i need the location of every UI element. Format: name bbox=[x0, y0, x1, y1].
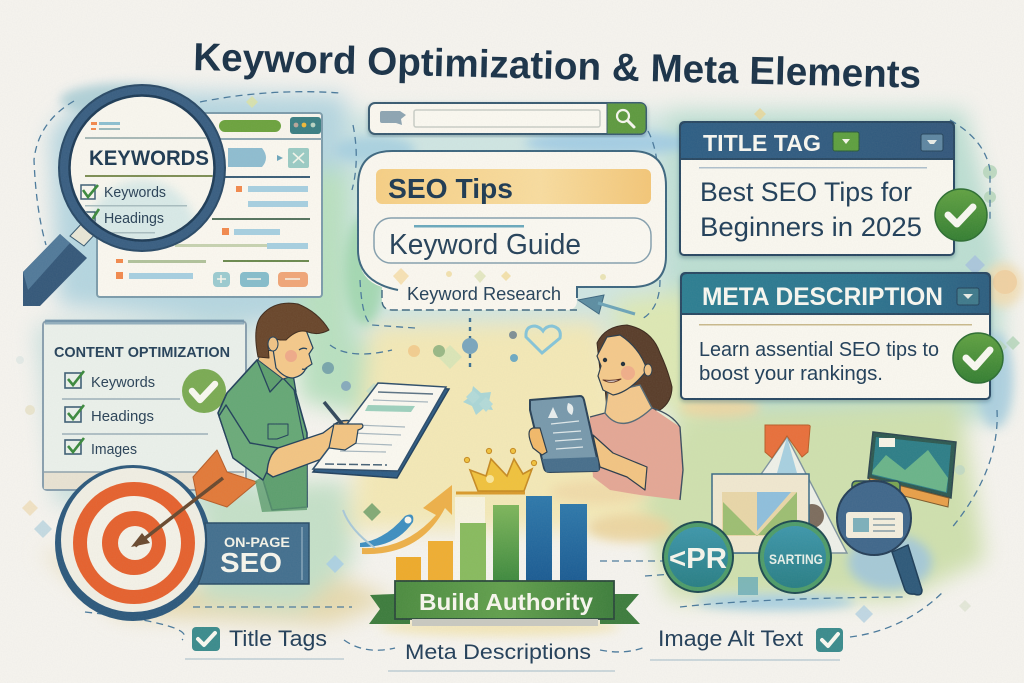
nav pill and close tile bbox=[228, 148, 309, 168]
ear bbox=[268, 337, 278, 351]
title tag text bbox=[700, 177, 922, 242]
panel: meta description bbox=[681, 273, 990, 399]
title tag header: TITLE TAG bbox=[703, 130, 821, 156]
checkbox: keywords bbox=[81, 185, 98, 199]
highlighted heading: SEO Tips: SEO Tips bbox=[388, 173, 513, 204]
icon: growth arrow bbox=[343, 485, 452, 554]
illustration: woman with tablet bbox=[529, 325, 683, 500]
icon: magnifying glass with keywords bbox=[23, 85, 225, 306]
icon: code badge: <PR bbox=[669, 543, 727, 575]
icon: monitor with chart bbox=[868, 432, 956, 507]
illustration: notebook bbox=[313, 383, 449, 478]
title: Keyword Optimization & Meta Elements bbox=[193, 36, 922, 97]
search button bbox=[607, 103, 646, 134]
face bbox=[597, 335, 647, 395]
icon: heart outline bbox=[526, 326, 560, 353]
icon: search camera bbox=[380, 111, 406, 125]
hair back bbox=[597, 325, 672, 410]
checklist: Images bbox=[91, 441, 137, 458]
panel: speech bubble with SEO tips bbox=[358, 151, 666, 310]
badge: on-page SEO: SEO bbox=[220, 547, 282, 578]
panel: title tag bbox=[680, 122, 954, 255]
banner: build authority bbox=[369, 581, 640, 626]
forearm bbox=[267, 420, 362, 477]
badge: on-page SEO bbox=[198, 523, 309, 584]
checklist label: Image Alt Text bbox=[650, 626, 843, 660]
badge: on-page SEO: ON-PAGE bbox=[224, 535, 290, 550]
checklist label: Title Tags: Title Tags bbox=[229, 626, 327, 651]
collar bbox=[257, 358, 296, 392]
icon: magnifier card bbox=[837, 481, 922, 595]
icon: green check title tag bbox=[935, 189, 987, 241]
checklist bbox=[62, 371, 208, 458]
sweater bbox=[590, 408, 683, 500]
checkbox: headings bbox=[86, 208, 100, 222]
icon: green check meta description bbox=[953, 333, 1003, 383]
orange bag bbox=[193, 450, 257, 507]
label: Keywords: Keywords bbox=[104, 185, 166, 201]
illustration: man writing bbox=[193, 303, 362, 512]
meta description header: META DESCRIPTION bbox=[702, 283, 943, 311]
label: Keyword Research: Keyword Research bbox=[407, 284, 561, 304]
magnifier ring bbox=[59, 85, 225, 251]
ear bbox=[644, 364, 652, 376]
icon: green check content bbox=[182, 369, 226, 413]
heading: KEYWORDS: KEYWORDS bbox=[89, 147, 209, 170]
magnifier handle bbox=[23, 220, 97, 306]
label: Headings: Headings bbox=[104, 211, 164, 227]
hands bbox=[529, 428, 547, 455]
title tag text: Beginners in 2025 bbox=[700, 212, 922, 242]
orange flag bbox=[765, 425, 810, 458]
arrow into target bbox=[131, 478, 223, 547]
title tag text: Best SEO Tips for bbox=[700, 177, 912, 207]
dashed connector lines bbox=[34, 92, 997, 652]
meta description header bbox=[681, 273, 990, 314]
toolbar buttons bbox=[213, 272, 308, 287]
green address bar bbox=[219, 120, 281, 132]
shirt torso bbox=[218, 360, 307, 510]
neck and collar bbox=[605, 385, 652, 423]
neck bbox=[258, 350, 293, 379]
tablet bbox=[530, 396, 599, 472]
banner: build authority: Build Authority bbox=[419, 589, 593, 615]
checklist: Keywords bbox=[91, 374, 155, 391]
meta description text bbox=[699, 339, 939, 385]
icon: crown bbox=[456, 448, 537, 493]
pen bbox=[324, 402, 360, 446]
arrow: pointing to keyword research bbox=[578, 295, 635, 314]
illustration: image and pyramid cluster bbox=[712, 425, 847, 553]
heading: content optimization: CONTENT OPTIMIZATION bbox=[54, 344, 230, 361]
search bar bbox=[369, 103, 646, 134]
sleeve bbox=[219, 405, 278, 480]
checklist label: Meta Descriptions: Meta Descriptions bbox=[405, 641, 591, 664]
icon: starting badge bbox=[758, 520, 832, 594]
illustration: target with arrow bbox=[55, 465, 223, 621]
pill: Keyword Guide: Keyword Guide bbox=[389, 229, 581, 261]
icon: starting badge: SARTING bbox=[769, 552, 823, 567]
search input bbox=[414, 110, 600, 127]
hand bbox=[329, 424, 363, 450]
meta description text: Learn assential SEO tips to bbox=[699, 339, 939, 361]
panel: content optimization bbox=[43, 321, 246, 490]
hair bbox=[256, 303, 329, 358]
meta description text: boost your rankings. bbox=[699, 363, 883, 385]
checklist label: Image Alt Text: Image Alt Text bbox=[658, 626, 803, 651]
panel: browser window bbox=[97, 113, 322, 297]
content rows bbox=[116, 176, 310, 279]
decorative dots bbox=[393, 268, 606, 285]
highlighted heading: SEO Tips bbox=[376, 169, 651, 204]
title tag header bbox=[680, 122, 954, 159]
pill: Keyword Guide bbox=[374, 218, 651, 263]
pocket bbox=[268, 424, 288, 439]
image card bbox=[712, 474, 809, 553]
face bbox=[270, 330, 313, 378]
icon: code badge bbox=[662, 521, 734, 593]
checklist label: Title Tags bbox=[185, 626, 344, 659]
window controls bbox=[290, 117, 321, 134]
icon: timeline dots bbox=[462, 331, 518, 362]
bar chart: growth bars bbox=[396, 496, 587, 581]
checklist: Headings bbox=[91, 408, 154, 425]
